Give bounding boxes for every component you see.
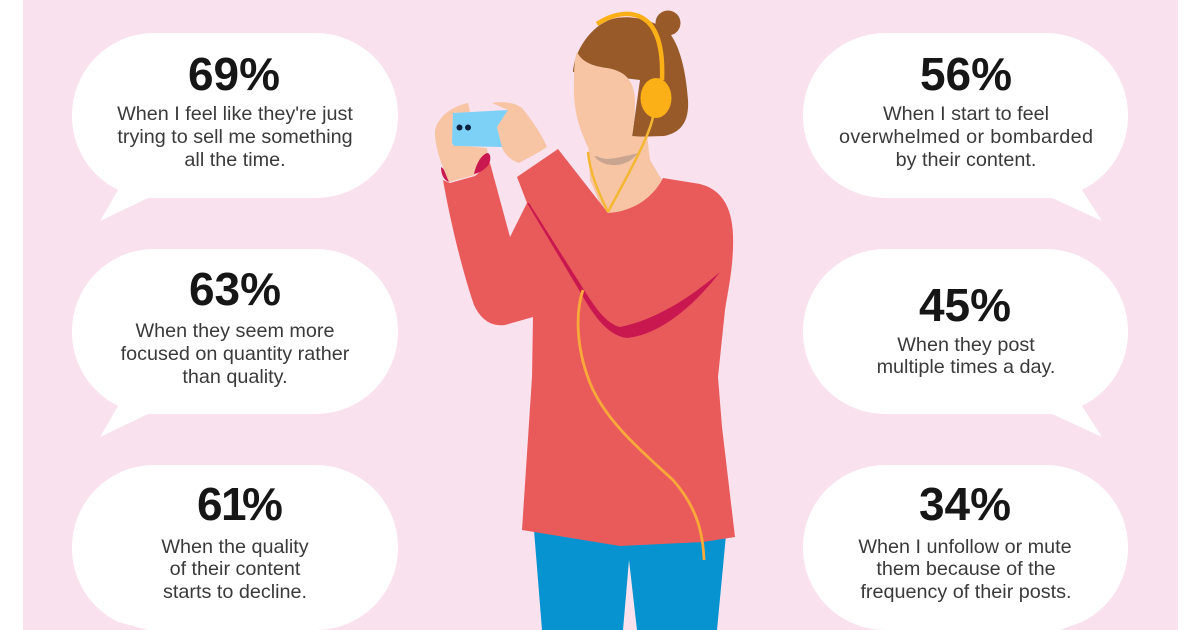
speech bubble: 69% <box>72 33 398 221</box>
neck <box>588 135 662 215</box>
speech bubble: 61%: 61% <box>197 478 283 530</box>
speech bubble: 45%: 45% <box>919 279 1011 331</box>
speech bubble: 63%: 63% <box>189 263 281 315</box>
hair bun <box>656 10 680 36</box>
headphone band <box>597 14 662 80</box>
speech bubble: 56%: overwhelmed or bombarded <box>839 126 1093 148</box>
right hand <box>492 102 547 163</box>
speech bubble: 34% <box>803 465 1128 630</box>
speech bubble: 61%: When the quality <box>161 536 309 558</box>
speech bubble: 61%: of their content <box>170 558 301 580</box>
speech bubble: 69%: all the time. <box>184 149 286 171</box>
phone <box>452 110 508 147</box>
speech bubble: 45% <box>803 249 1128 437</box>
face <box>574 52 648 159</box>
speech bubble: 34%: 34% <box>919 478 1011 530</box>
crimson cuff: inner wrist <box>474 153 490 174</box>
speech bubble: 69%: When I feel like they're just <box>117 103 353 125</box>
speech bubble: 63%: than quality. <box>182 366 288 388</box>
speech bubble: 61% <box>72 465 398 630</box>
speech bubble: 56%: 56% <box>920 48 1012 100</box>
phone camera dots <box>456 124 471 130</box>
speech bubble: 56%: by their content. <box>896 149 1036 171</box>
speech bubble: 34%: When I unfollow or mute <box>858 536 1072 558</box>
speech bubble: 34%: frequency of their posts. <box>860 581 1072 603</box>
speech bubble: 34%: them because of the <box>876 558 1056 580</box>
earphone wires <box>588 117 653 212</box>
crimson cuff: outer wrist <box>441 167 449 182</box>
illustration: woman with phone and headphones <box>435 10 735 630</box>
speech bubble: 63%: When they seem more <box>136 320 334 342</box>
speech bubble: 61%: starts to decline. <box>163 581 307 603</box>
neck shadow <box>594 153 638 165</box>
speech bubble: 45%: multiple times a day. <box>877 356 1055 378</box>
speech bubble: 69%: 69% <box>188 48 280 100</box>
sweater crease <box>527 203 720 338</box>
speech bubble: 69%: trying to sell me something <box>117 126 353 148</box>
speech bubble: 45%: When they post <box>897 334 1035 356</box>
speech bubble: 56% <box>803 33 1128 221</box>
speech bubble: 63%: focused on quantity rather <box>121 343 350 365</box>
sweater <box>443 149 735 546</box>
ear cup <box>640 78 672 118</box>
hair <box>573 17 688 137</box>
left hand <box>435 103 488 182</box>
long cable <box>578 290 704 560</box>
speech bubble: 56%: When I start to feel <box>883 103 1049 125</box>
trousers <box>534 530 726 630</box>
speech bubble: 63% <box>72 249 398 437</box>
